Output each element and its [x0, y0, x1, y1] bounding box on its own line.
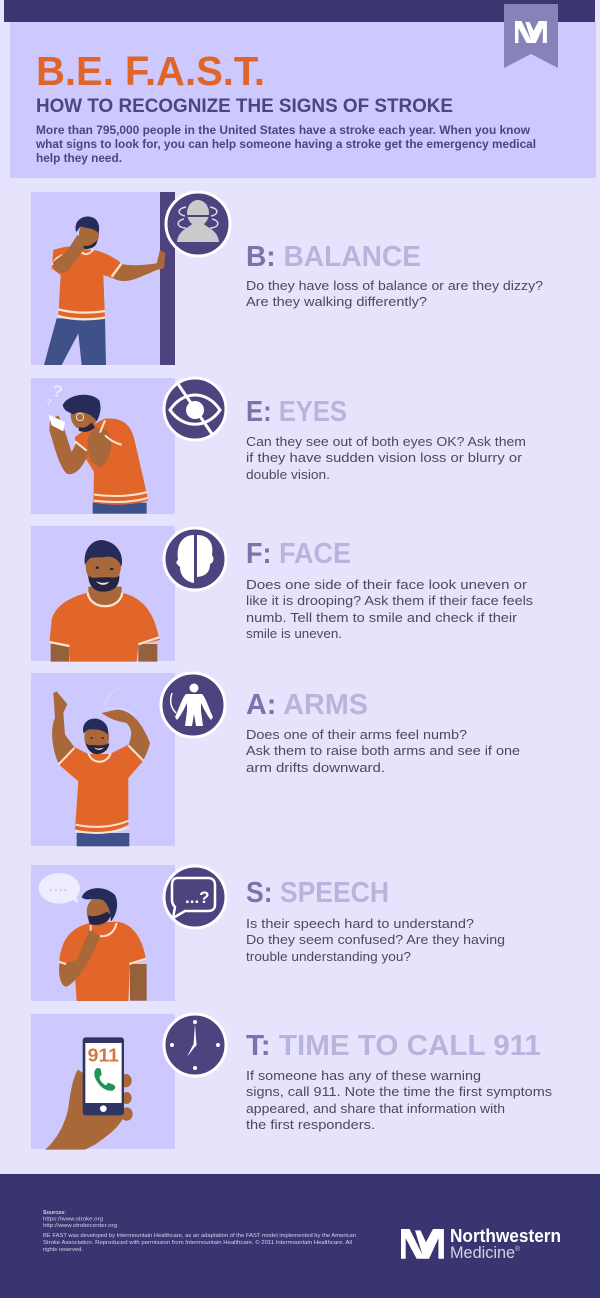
- illustration: man with drooping face: [31, 526, 175, 662]
- panel: speech: [31, 865, 505, 1001]
- illustration: man squinting at phone: [31, 378, 175, 514]
- top bar: [4, 0, 595, 22]
- logo: Northwestern Medicine: ®: [515, 1245, 521, 1253]
- icon: question speech bubble: [164, 866, 226, 928]
- sources: https://www.stroke.org: [43, 1216, 103, 1222]
- text: speech: Do they seem confused? Are they having: [246, 932, 505, 947]
- text: time: appeared, and share that information with: [246, 1101, 505, 1116]
- logo: Northwestern Medicine: [401, 1226, 561, 1262]
- icon: clock: [164, 1014, 226, 1076]
- subtitle: HOW TO RECOGNIZE THE SIGNS OF STROKE: [36, 95, 453, 117]
- panel: time: [31, 1014, 552, 1150]
- panel: eyes: [31, 378, 526, 514]
- question marks: ?: [46, 397, 52, 407]
- text: arms: [246, 727, 520, 775]
- text: eyes: Can they see out of both eyes OK? Ask them: [246, 434, 526, 449]
- speech bubble: [39, 873, 80, 904]
- heading: balance: B: BALANCE: [246, 241, 421, 273]
- text: eyes: double vision.: [246, 467, 330, 482]
- text: balance: Are they walking differently?: [246, 294, 427, 309]
- ribbon logo: [504, 4, 558, 68]
- illustration: man raising arms: [31, 673, 175, 846]
- question marks: [46, 381, 64, 407]
- illustration: man with speech bubble: [31, 865, 175, 1001]
- text: face: smile is uneven.: [246, 626, 342, 641]
- icon: split face: [164, 528, 226, 590]
- text: face: Does one side of their face look uneven or: [246, 577, 528, 592]
- icon: crossed eye: [164, 378, 226, 440]
- heading: eyes: E: EYES: [246, 396, 347, 428]
- text: arms: arm drifts downward.: [246, 760, 385, 775]
- sources: http://www.strokecenter.org: [43, 1223, 117, 1229]
- intro paragraph: what signs to look for, you can help someone having a stroke get the emergency medical: [35, 139, 536, 151]
- text: speech: trouble understanding you?: [246, 949, 411, 964]
- logo: Northwestern Medicine: Medicine: [450, 1243, 518, 1262]
- heading: face: F: FACE: [246, 538, 351, 570]
- text: speech: Is their speech hard to understand?: [246, 916, 474, 931]
- sources: Stroke Association. Reproduced with permission from Intermountain Healthcare. © 2011 Intermountain Healthcare. All: [43, 1239, 352, 1246]
- text: arms: Ask them to raise both arms and see if one: [246, 743, 520, 758]
- intro paragraph: More than 795,000 people in the United States have a stroke each year. When you know: [36, 125, 530, 137]
- footer: [0, 1174, 600, 1298]
- illustration: man leaning on wall: [31, 192, 175, 365]
- panel: arms: [31, 673, 520, 846]
- sources: Sources:: [43, 1210, 66, 1216]
- text: face: [246, 577, 533, 641]
- text: time: If someone has any of these warning: [246, 1068, 481, 1083]
- 911 label: 911: [88, 1044, 119, 1065]
- icon: body with arm drift: [161, 673, 225, 737]
- text: time: signs, call 911. Note the time the first symptoms: [246, 1084, 552, 1099]
- text: eyes: [246, 434, 526, 482]
- panel: balance: [31, 192, 543, 365]
- illustration: hand holding phone: [31, 1014, 175, 1150]
- text: face: numb. Tell them to smile and check if their: [246, 610, 518, 625]
- sources: rights reserved.: [43, 1247, 83, 1253]
- heading: arms: A: ARMS: [246, 689, 368, 721]
- heading: time: T: TIME TO CALL 911: [246, 1030, 541, 1062]
- header panel: [4, 0, 596, 178]
- icon: question speech bubble: ...?: [185, 888, 210, 907]
- panel: face: [31, 526, 533, 662]
- text: time: [246, 1068, 552, 1132]
- text: eyes: if they have sudden vision loss or blurry or: [246, 450, 523, 465]
- text: face: like it is drooping? Ask them if their face feels: [246, 593, 533, 608]
- intro paragraph: [35, 125, 536, 165]
- text: speech: [246, 916, 505, 964]
- text: balance: [246, 278, 543, 309]
- text: balance: Do they have loss of balance or are they dizzy?: [246, 278, 543, 293]
- heading: speech: S: SPEECH: [246, 877, 389, 909]
- icon: green handset: [94, 1068, 115, 1091]
- text: arms: Does one of their arms feel numb?: [246, 727, 467, 742]
- sources: BE FAST was developed by Intermountain Healthcare, as an adaptation of the FAST model implemented by the American: [43, 1233, 356, 1239]
- text: time: the first responders.: [246, 1117, 375, 1132]
- question marks: ?: [51, 381, 64, 402]
- logo: Northwestern Medicine: Northwestern: [450, 1226, 561, 1246]
- intro paragraph: help they need.: [36, 153, 122, 165]
- icon: dizzy head: [166, 192, 230, 256]
- title: B.E. F.A.S.T.: [36, 48, 265, 94]
- sources: [43, 1210, 356, 1253]
